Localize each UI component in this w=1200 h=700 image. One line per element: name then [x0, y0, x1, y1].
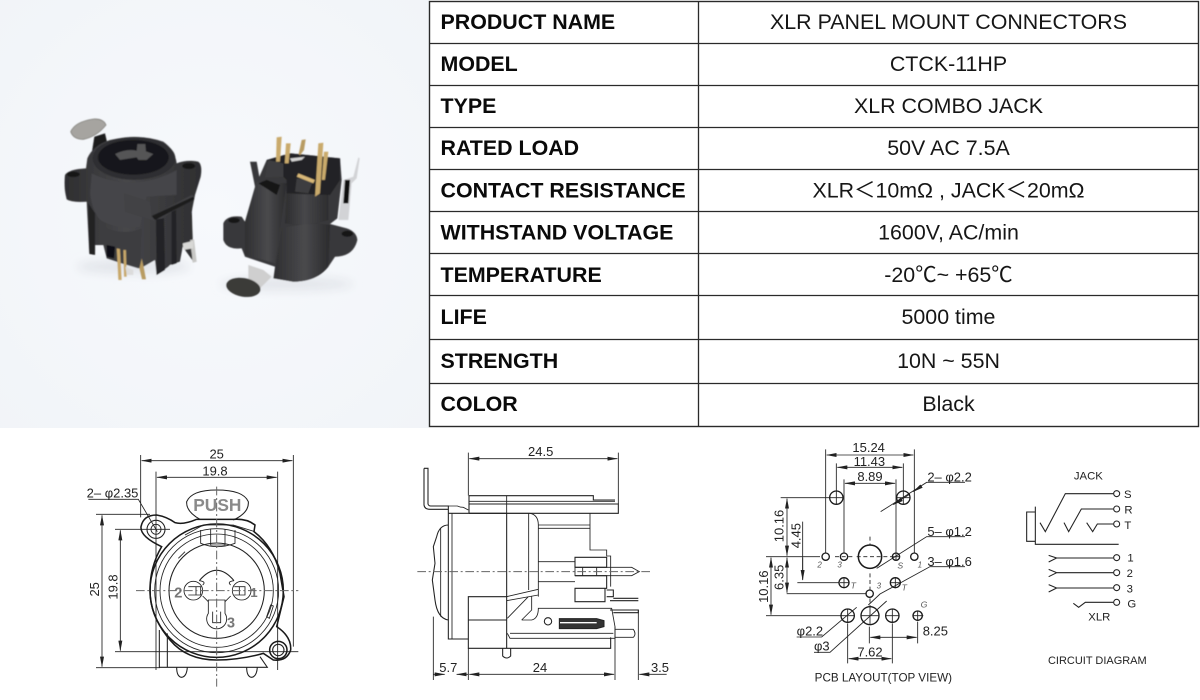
pin labels: G: [921, 599, 928, 609]
caption: PCB LAYOUT(TOP VIEW): [815, 672, 952, 685]
dimension lines: 25: [87, 582, 102, 597]
dimension lines: 2– φ2.2: [927, 470, 972, 485]
row: product name: PRODUCT NAME: [440, 10, 615, 34]
jack symbol: [1027, 470, 1133, 544]
xlr symbol: G: [1127, 599, 1136, 611]
row: model: MODEL: [440, 52, 518, 76]
row: withstand voltage: 1600V, AC/min: [878, 220, 1019, 244]
dimension lines: 7.62: [857, 645, 883, 660]
dimension lines: 6.35: [772, 565, 787, 590]
dimension lines: 15.24: [852, 440, 885, 455]
dimension lines: 2– φ2.35: [87, 486, 138, 501]
xlr symbol: [1049, 553, 1136, 624]
dimension lines: 5– φ1.2: [927, 524, 972, 539]
socket contacts: 3: [227, 615, 235, 631]
socket contacts: [174, 570, 258, 631]
dimension lines: 3– φ1.6: [927, 554, 972, 569]
pin labels: T: [851, 581, 857, 591]
dimension lines: 19.8: [202, 463, 228, 478]
pin labels: T: [902, 583, 908, 593]
dimension lines: 19.8: [106, 574, 121, 600]
row: temperature: TEMPERATURE: [440, 263, 602, 287]
xlr symbol: 2: [1127, 568, 1133, 580]
pin labels: 2: [816, 560, 822, 569]
dimension lines: 8.25: [923, 624, 948, 639]
row: contact resistance: CONTACT RESISTANCE: [440, 178, 686, 202]
jack symbol: T: [1124, 520, 1131, 532]
pin labels: 1: [918, 561, 922, 570]
dimension lines: φ3: [814, 639, 830, 654]
row: type: XLR COMBO JACK: [854, 94, 1044, 118]
main housing: [432, 513, 611, 639]
dimension lines: [87, 447, 298, 670]
lower block and terminals: [468, 589, 615, 658]
row: product name: [440, 10, 1127, 34]
photo: right connector: [223, 137, 360, 300]
row: strength: STRENGTH: [440, 349, 558, 373]
dimension lines: 24: [533, 660, 547, 675]
caption: CIRCUIT DIAGRAM: [1048, 655, 1147, 667]
socket contacts: 1: [250, 585, 258, 600]
center line: [417, 570, 651, 573]
row: color: [440, 392, 975, 416]
row: model: CTCK-11HP: [890, 52, 1007, 76]
pin labels: [816, 560, 928, 609]
top bracket and push tab: [424, 468, 618, 513]
dimension lines: 11.43: [854, 454, 885, 469]
dimension lines: 3.5: [651, 660, 669, 675]
row: withstand voltage: WITHSTAND VOLTAGE: [440, 220, 673, 244]
diagram: side view: [417, 444, 669, 680]
row: life: [440, 305, 995, 329]
row: product name: XLR PANEL MOUNT CONNECTORS: [770, 10, 1127, 34]
xlr symbol: 3: [1127, 583, 1133, 595]
connector housing: [141, 515, 291, 677]
row: rated load: [440, 136, 1010, 160]
jack symbol: JACK: [1074, 470, 1103, 482]
dimension lines: [433, 444, 669, 680]
contact pins: [575, 557, 639, 637]
row: life: 5000 time: [902, 305, 995, 329]
diagram: front view: [87, 447, 298, 687]
dimension lines: 5.7: [439, 660, 457, 675]
row: strength: 10N ~ 55N: [897, 349, 1000, 373]
push tab: PUSH: [193, 495, 241, 515]
jack symbol: R: [1124, 504, 1133, 516]
panel: product photo: [0, 0, 429, 428]
dimension lines: φ2.2: [797, 623, 823, 638]
dimension lines: 10.16: [756, 570, 771, 603]
dimension lines: 24.5: [528, 444, 553, 459]
dimension lines: [756, 440, 972, 663]
row: contact resistance: [440, 178, 1085, 202]
holes: [822, 491, 923, 625]
row: withstand voltage: [440, 220, 1019, 244]
row: rated load: RATED LOAD: [440, 136, 579, 160]
row: rated load: 50V AC 7.5A: [887, 136, 1010, 160]
row: type: TYPE: [440, 94, 496, 118]
xlr symbol: XLR: [1088, 612, 1110, 624]
row: life: LIFE: [440, 305, 487, 329]
dimension lines: 25: [209, 447, 224, 462]
pin labels: S: [897, 561, 903, 571]
socket contacts: 2: [174, 586, 182, 602]
row: strength: [440, 349, 1000, 373]
row: type: [440, 94, 1044, 118]
dimension lines: 10.16: [772, 510, 787, 542]
row: temperature: -20℃~ +65℃: [884, 263, 1013, 287]
row: model: [440, 52, 1007, 76]
jack symbol: S: [1124, 489, 1132, 501]
pin labels: 3: [837, 560, 842, 569]
push tab: [187, 490, 248, 520]
diagram: pcb layout: [756, 440, 972, 685]
center lines: [136, 487, 298, 687]
pin labels: 3: [877, 581, 882, 590]
row: contact resistance: XLR＜10mΩ , JACK＜20mΩ: [812, 178, 1085, 202]
xlr symbol: 1: [1127, 553, 1134, 565]
diagram: circuit: [1027, 470, 1147, 667]
dimension lines: 8.89: [857, 469, 883, 484]
dimension lines: 4.45: [789, 523, 804, 548]
row: color: Black: [922, 392, 975, 416]
panel: specification table: [430, 2, 1198, 426]
photo: left connector: [64, 119, 201, 280]
row: color: COLOR: [440, 392, 518, 416]
row: temperature: [440, 263, 1013, 287]
